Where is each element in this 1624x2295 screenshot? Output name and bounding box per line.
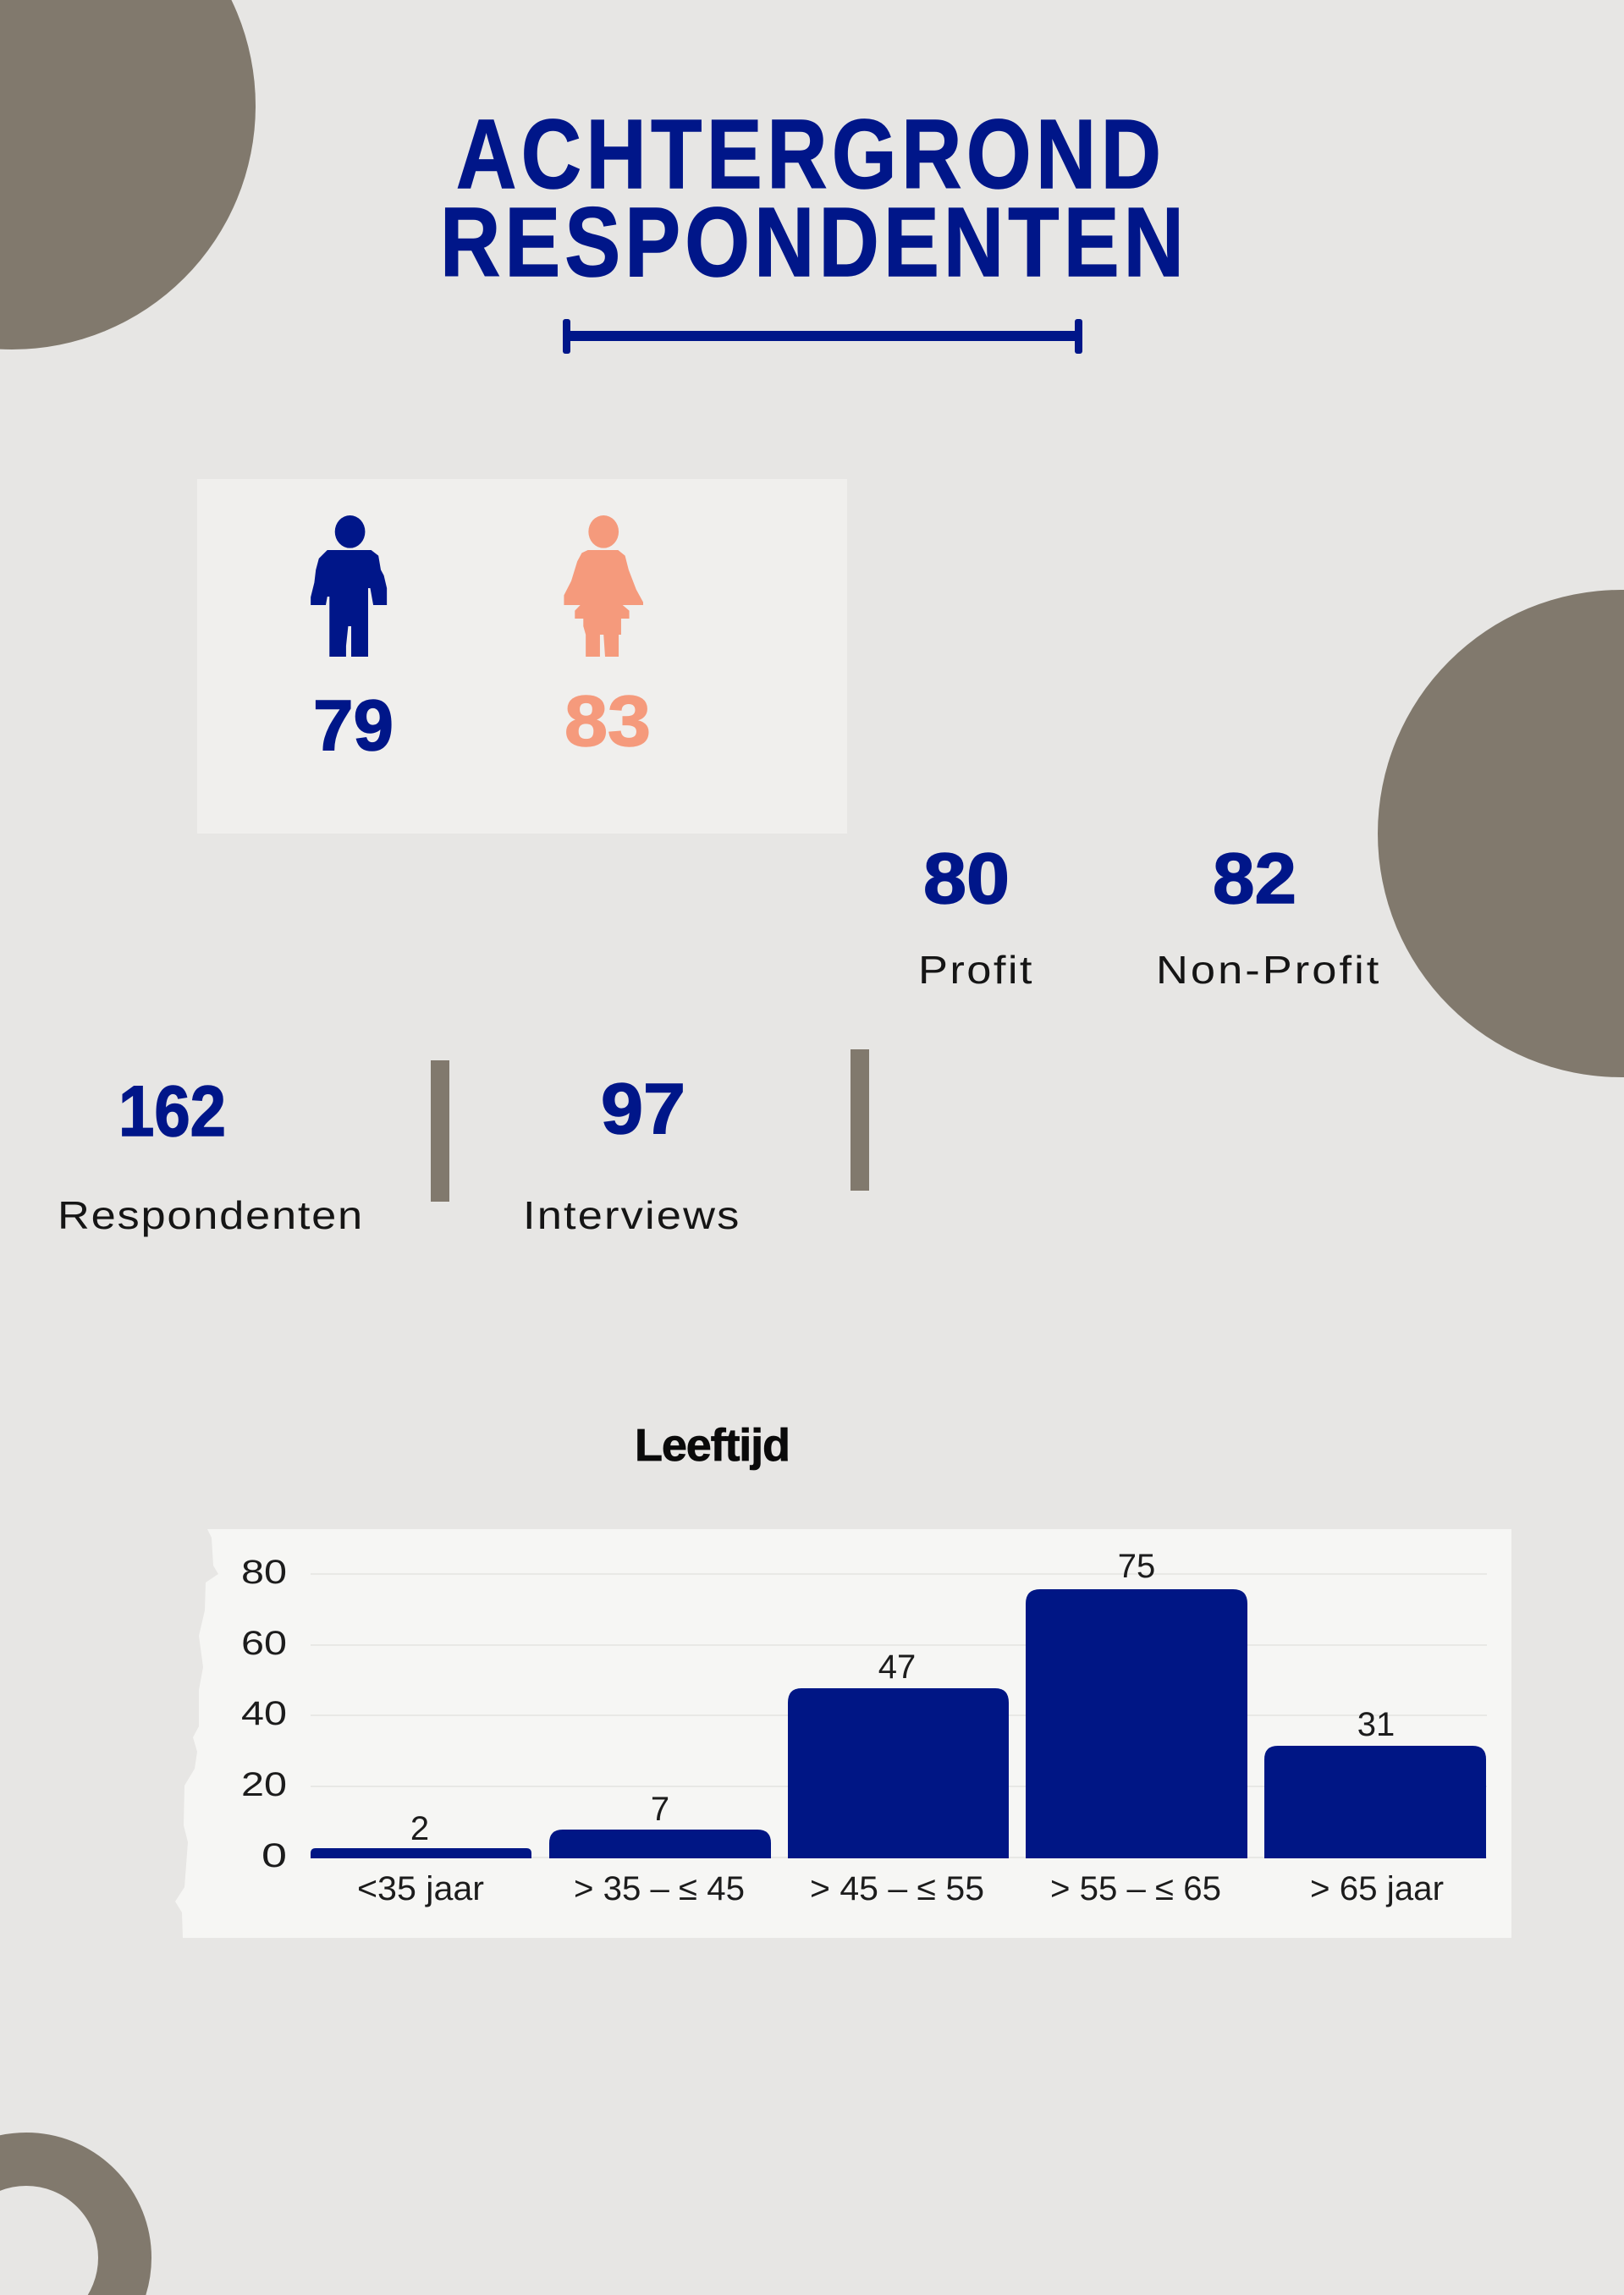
- stat: interviews: [523, 1069, 739, 1237]
- torn paper background: [175, 1529, 1511, 1938]
- number: women: 83: [564, 681, 651, 761]
- stat: non-profit: Non-Profit: [1156, 949, 1379, 992]
- x axis labels: > 55 – ≤ 65: [1050, 1870, 1221, 1907]
- bar value labels: 7: [651, 1791, 669, 1828]
- stat: non-profit: [1156, 839, 1379, 992]
- stat: respondents: [58, 1071, 362, 1237]
- bars: [311, 1589, 1486, 1858]
- x axis labels: > 45 – ≤ 55: [810, 1870, 984, 1907]
- decorative ring: bottom left: [0, 2160, 125, 2295]
- y axis labels: [241, 1554, 287, 1874]
- x axis labels: > 65 jaar: [1310, 1870, 1444, 1907]
- number: men: 79: [313, 685, 394, 765]
- bar value labels: 31: [1357, 1706, 1395, 1743]
- stat: profit: Profit: [918, 949, 1032, 992]
- y axis labels: 60: [241, 1625, 287, 1662]
- x axis labels: <35 jaar: [357, 1870, 484, 1907]
- bar value labels: 47: [878, 1648, 916, 1686]
- divider bar 2: [851, 1049, 869, 1191]
- x axis labels: [357, 1870, 1444, 1907]
- chart heading: Leeftijd: [635, 1420, 790, 1471]
- stat: profit: 80: [923, 839, 1010, 918]
- y axis labels: 20: [241, 1766, 287, 1803]
- stat: respondents: Respondenten: [58, 1194, 362, 1237]
- title: [440, 99, 1184, 297]
- title rule: [563, 319, 1082, 354]
- decorative circle: top left: [0, 0, 256, 349]
- y axis labels: 0: [261, 1837, 287, 1874]
- stat: respondents: 162: [118, 1071, 226, 1151]
- x axis labels: > 35 – ≤ 45: [574, 1870, 745, 1907]
- icon: woman: [564, 515, 643, 657]
- decorative circle: right: [1378, 590, 1624, 1077]
- title: RESPONDENTEN: [440, 187, 1184, 297]
- divider bar 1: [431, 1060, 449, 1202]
- stat: profit: [918, 839, 1032, 992]
- stat: non-profit: 82: [1213, 839, 1296, 918]
- y axis labels: 80: [241, 1554, 287, 1591]
- icon: man: [311, 515, 387, 657]
- panel: age bar chart: [175, 1529, 1511, 1938]
- stat: interviews: Interviews: [523, 1194, 739, 1237]
- panel: gender: [197, 479, 847, 834]
- title: ACHTERGROND: [456, 99, 1161, 209]
- bar value labels: 75: [1118, 1548, 1155, 1585]
- y axis labels: 40: [241, 1695, 287, 1732]
- grid lines: [311, 1573, 1487, 1858]
- bar value labels: 2: [410, 1810, 429, 1847]
- bar value labels: [410, 1548, 1395, 1847]
- stat: interviews: 97: [601, 1069, 685, 1148]
